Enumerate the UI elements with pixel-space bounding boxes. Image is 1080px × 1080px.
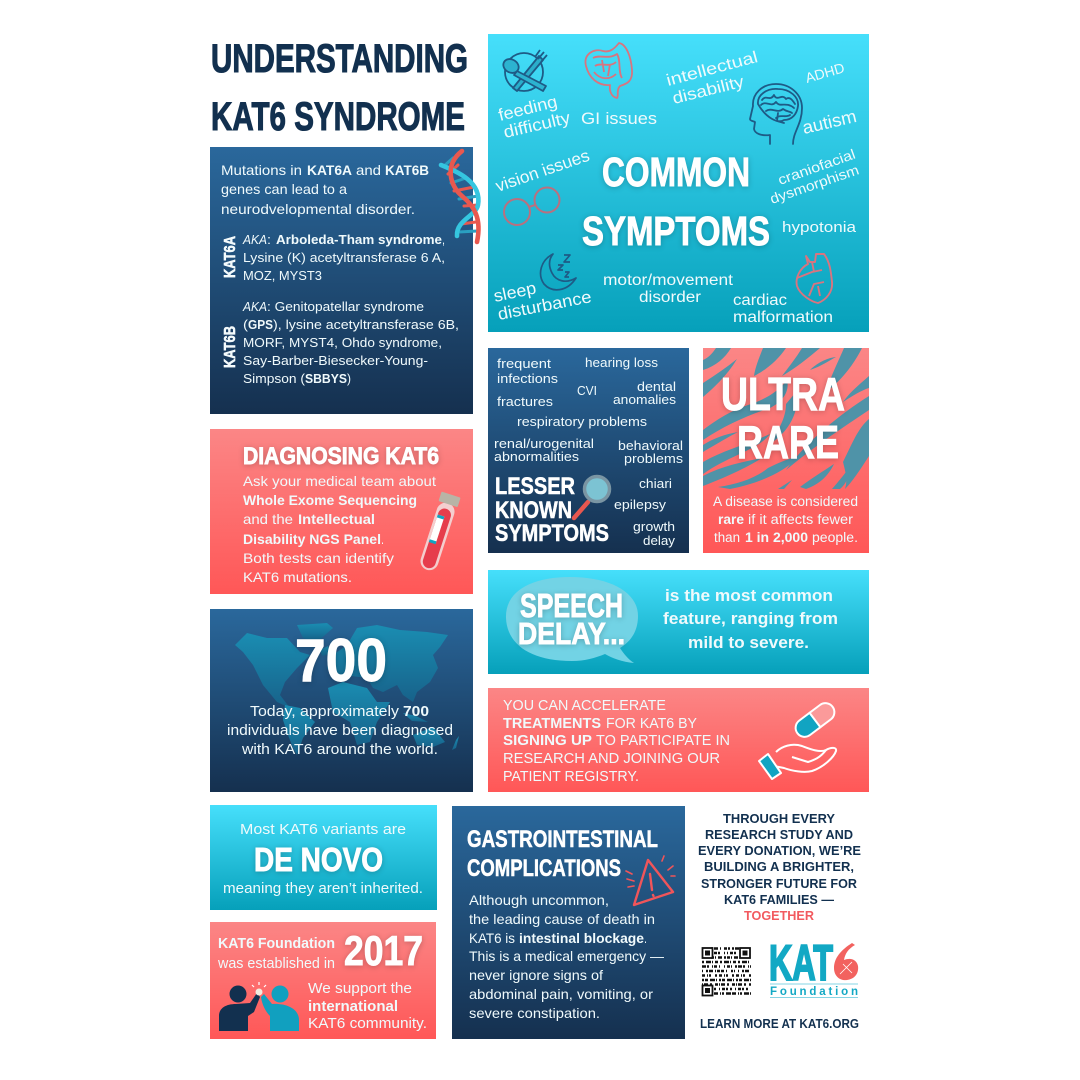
established text bbox=[217, 936, 335, 972]
icon: sleeping moon bbox=[541, 254, 576, 290]
symptom labels: malformation bbox=[733, 309, 833, 326]
icon: blood test tube bbox=[417, 492, 461, 573]
symptom labels: sleep bbox=[492, 278, 538, 306]
heading: diagnosing: DIAGNOSING KAT6 bbox=[243, 443, 439, 470]
diagnosis text: and the bbox=[243, 511, 293, 527]
registry text: TREATMENTS bbox=[503, 716, 601, 732]
symptom labels: disorder bbox=[639, 289, 701, 306]
heading: de novo: DE NOVO bbox=[254, 841, 383, 878]
KAT6A aliases: MOZ, MYST3 bbox=[243, 268, 322, 283]
KAT6A aliases: AKA bbox=[242, 232, 267, 247]
heading: speech delay: SPEECH bbox=[520, 587, 623, 624]
symptom labels: hypotonia bbox=[782, 219, 857, 236]
panel: gastrointestinal complications bbox=[452, 806, 685, 1039]
symptom labels: motor/movement bbox=[603, 272, 734, 289]
heading: speech delay bbox=[518, 587, 625, 651]
symptom labels: epilepsy bbox=[614, 497, 667, 512]
KAT6B aliases: ) bbox=[347, 371, 351, 386]
symptom labels: fractures bbox=[497, 394, 554, 409]
registry text: FOR KAT6 BY bbox=[606, 716, 697, 732]
diagnosis text bbox=[243, 473, 436, 585]
GI body text: intestinal blockage bbox=[519, 930, 644, 946]
closing message: TOGETHER bbox=[744, 909, 814, 923]
GI body text: . bbox=[644, 930, 647, 946]
registry text: SIGNING UP bbox=[503, 733, 592, 749]
panel: foundation 2017 bbox=[210, 922, 436, 1039]
GI body text: abdominal pain, vomiting, or bbox=[469, 986, 653, 1002]
rare definition text: if it affects fewer bbox=[748, 512, 854, 527]
symptom labels bbox=[492, 48, 861, 326]
GI body text: This is a medical emergency — bbox=[469, 948, 664, 964]
speech text: feature, ranging from bbox=[663, 610, 838, 628]
year 2017: 2017 bbox=[344, 927, 423, 974]
GI body text: the leading cause of death in bbox=[469, 911, 655, 927]
closing message: KAT6 FAMILIES — bbox=[724, 893, 834, 907]
panel: ultra rare bbox=[703, 348, 869, 553]
KAT6B aliases: : Genitopatellar syndrome bbox=[267, 299, 424, 314]
diagnosis text: Whole Exome Sequencing bbox=[243, 492, 417, 508]
icon: anatomical heart bbox=[797, 254, 832, 303]
KAT6B aliases: ( bbox=[243, 317, 249, 332]
speech text: mild to severe. bbox=[688, 634, 809, 652]
learn more link: LEARN MORE AT KAT6.ORG bbox=[700, 1017, 859, 1031]
diagnosed text: Today, approximately bbox=[250, 703, 400, 720]
KAT6B aliases: Say-Barber-Biesecker-Young- bbox=[243, 353, 428, 368]
KAT6A aliases bbox=[222, 232, 445, 283]
panel: what is KAT6 bbox=[210, 147, 479, 414]
closing message: THROUGH EVERY bbox=[723, 812, 836, 826]
symptom labels: disturbance bbox=[496, 287, 593, 324]
KAT6B aliases: AKA bbox=[242, 299, 267, 314]
heading: GI complications bbox=[467, 826, 658, 882]
symptom labels: hearing loss bbox=[585, 355, 659, 370]
symptom labels: behavioral bbox=[618, 438, 683, 453]
heading: common symptoms: COMMON bbox=[602, 149, 750, 195]
heading: speech delay: DELAY... bbox=[518, 616, 625, 651]
speech text bbox=[663, 587, 838, 652]
icon: warning triangle bbox=[626, 856, 675, 905]
diagnosed text: with KAT6 around the world. bbox=[241, 741, 438, 758]
icon: head and brain bbox=[750, 84, 802, 144]
icon: glasses bbox=[504, 188, 560, 225]
symptom labels: craniofacial bbox=[776, 146, 857, 188]
KAT6A aliases: , bbox=[442, 232, 445, 247]
symptom labels: CVI bbox=[577, 383, 597, 398]
KAT6B aliases: SBBYS bbox=[305, 371, 347, 386]
icon: DNA helix bbox=[441, 151, 479, 242]
panel: diagnosing KAT6 bbox=[210, 429, 473, 594]
heading: lesser known symptoms: KNOWN bbox=[495, 497, 572, 524]
KAT6 Foundation logo: KAT bbox=[769, 935, 833, 991]
KAT6B aliases: MORF, MYST4, Ohdo syndrome, bbox=[243, 335, 442, 350]
established text: KAT6 Foundation bbox=[218, 936, 335, 952]
heading: GI complications: GASTROINTESTINAL bbox=[467, 826, 658, 853]
diagnosis text: Both tests can identify bbox=[243, 550, 394, 566]
KAT6B aliases: GPS bbox=[248, 317, 273, 332]
symptom labels: disability bbox=[671, 73, 747, 108]
KAT6A aliases: Arboleda-Tham syndrome bbox=[276, 232, 442, 247]
icon: pill over hand bbox=[759, 700, 838, 779]
closing message: BUILDING A BRIGHTER, bbox=[704, 860, 854, 874]
icon: plate and cutlery bbox=[501, 50, 547, 91]
heading: common symptoms: SYMPTOMS bbox=[582, 208, 770, 254]
intro text bbox=[221, 162, 429, 217]
diagnosis text: Intellectual bbox=[298, 511, 375, 527]
title bbox=[211, 37, 468, 139]
rare definition text: A disease is considered bbox=[713, 494, 858, 509]
heading: GI complications: COMPLICATIONS bbox=[467, 855, 621, 882]
GI body text bbox=[469, 892, 664, 1021]
icon: high five bbox=[219, 982, 299, 1031]
symptom labels: chiari bbox=[639, 476, 672, 491]
GI body text: never ignore signs of bbox=[469, 967, 603, 983]
KAT6A aliases: Lysine (K) acetyltransferase 6 A, bbox=[243, 250, 445, 265]
closing message: EVERY DONATION, WE’RE bbox=[698, 844, 861, 858]
rare definition text: 1 in 2,000 bbox=[745, 530, 808, 545]
registry text: RESEARCH AND JOINING OUR bbox=[503, 751, 720, 767]
GI body text: severe constipation. bbox=[469, 1005, 600, 1021]
diagnosis text: Disability NGS Panel bbox=[243, 531, 381, 547]
big number 700: 700 bbox=[295, 627, 387, 694]
de novo intro: Most KAT6 variants are bbox=[240, 821, 406, 838]
symptom labels: renal/urogenital bbox=[494, 436, 594, 451]
symptom labels: frequent bbox=[497, 356, 551, 371]
support text: international bbox=[308, 999, 398, 1015]
symptom labels: autism bbox=[800, 106, 858, 138]
symptom labels: respiratory problems bbox=[517, 414, 648, 429]
closing message: RESEARCH STUDY AND bbox=[705, 828, 853, 842]
symptom labels bbox=[494, 355, 684, 548]
established text: was established in bbox=[217, 956, 335, 972]
diagnosis text: . bbox=[381, 531, 384, 547]
diagnosed text bbox=[227, 703, 453, 758]
symptom labels: difficulty bbox=[502, 108, 573, 142]
registry text: PATIENT REGISTRY. bbox=[503, 769, 639, 785]
symptom labels: dental bbox=[637, 379, 676, 394]
registry text: TO PARTICIPATE IN bbox=[596, 733, 730, 749]
heading: common symptoms bbox=[582, 149, 770, 254]
intro text: Mutations in bbox=[221, 162, 302, 178]
symptom labels: feeding bbox=[496, 92, 559, 125]
symptom labels: delay bbox=[643, 533, 676, 548]
icon: intestines bbox=[585, 43, 632, 98]
intro text: KAT6A bbox=[307, 162, 352, 178]
world map bbox=[235, 623, 459, 755]
diagnosis text: Ask your medical team about bbox=[243, 473, 436, 489]
intro text: neurodvelopmental disorder. bbox=[221, 201, 415, 217]
tiger stripe pattern bbox=[703, 348, 869, 489]
registry text bbox=[503, 698, 730, 785]
KAT6B aliases: ), lysine acetyltransferase 6B, bbox=[273, 317, 459, 332]
icon: magnifying glass bbox=[574, 476, 610, 518]
KAT6B aliases: Simpson ( bbox=[243, 371, 306, 386]
diagnosis text: KAT6 mutations. bbox=[243, 569, 352, 585]
GI body text: Although uncommon, bbox=[469, 892, 609, 908]
heading: ultra rare: RARE bbox=[737, 416, 839, 468]
heading: lesser known symptoms bbox=[495, 473, 609, 547]
symptom labels: vision issues bbox=[493, 146, 592, 196]
closing message bbox=[698, 812, 861, 923]
title: KAT6 SYNDROME bbox=[211, 95, 465, 139]
symptom labels: GI issues bbox=[581, 109, 657, 128]
symptom labels: cardiac bbox=[733, 292, 787, 309]
panel: lesser known symptoms bbox=[488, 348, 689, 553]
panel: de novo bbox=[210, 805, 437, 910]
heading: ultra rare bbox=[721, 368, 845, 468]
intro text: and bbox=[356, 162, 381, 178]
KAT6A aliases: : bbox=[267, 232, 271, 247]
symptom labels: intellectual bbox=[664, 48, 760, 90]
rare definition text: rare bbox=[718, 512, 744, 527]
heading: ultra rare: ULTRA bbox=[721, 368, 845, 420]
title: UNDERSTANDING bbox=[211, 37, 468, 81]
QR code bbox=[702, 948, 751, 996]
symptom labels: growth bbox=[633, 519, 675, 534]
diagnosed text: individuals have been diagnosed bbox=[227, 722, 453, 739]
KAT6B aliases: KAT6B bbox=[222, 326, 239, 368]
support text: KAT6 community. bbox=[308, 1016, 427, 1032]
symptom labels: abnormalities bbox=[494, 449, 580, 464]
KAT6A aliases: KAT6A bbox=[222, 236, 239, 278]
intro text: KAT6B bbox=[385, 162, 429, 178]
symptom labels: dysmorphism bbox=[768, 161, 861, 207]
panel: accelerate treatments bbox=[488, 688, 869, 792]
support text: We support the bbox=[308, 981, 412, 997]
rare definition text: people. bbox=[812, 530, 858, 545]
symptom labels: problems bbox=[624, 451, 684, 466]
diagnosed text: 700 bbox=[403, 703, 429, 720]
panel: speech delay bbox=[488, 570, 869, 674]
de novo explanation: meaning they aren’t inherited. bbox=[223, 881, 423, 897]
KAT6 Foundation logo: Foundation bbox=[770, 986, 858, 998]
symptom labels: ADHD bbox=[803, 59, 846, 86]
closing message: STRONGER FUTURE FOR bbox=[701, 877, 857, 891]
support text bbox=[308, 981, 427, 1032]
GI body text: KAT6 is bbox=[469, 930, 515, 946]
speech text: is the most common bbox=[665, 587, 833, 605]
heading: lesser known symptoms: SYMPTOMS bbox=[495, 520, 609, 547]
symptom labels: infections bbox=[497, 371, 559, 386]
rare definition text bbox=[713, 494, 858, 545]
registry text: YOU CAN ACCELERATE bbox=[503, 698, 666, 714]
speech bubble bbox=[506, 577, 638, 663]
rare definition text: than bbox=[714, 530, 740, 545]
intro text: genes can lead to a bbox=[221, 181, 347, 197]
symptom labels: anomalies bbox=[613, 392, 677, 407]
panel: common symptoms bbox=[488, 34, 869, 332]
heading: lesser known symptoms: LESSER bbox=[495, 473, 575, 500]
panel: 700 diagnosed bbox=[210, 609, 473, 792]
KAT6B aliases bbox=[222, 299, 459, 386]
